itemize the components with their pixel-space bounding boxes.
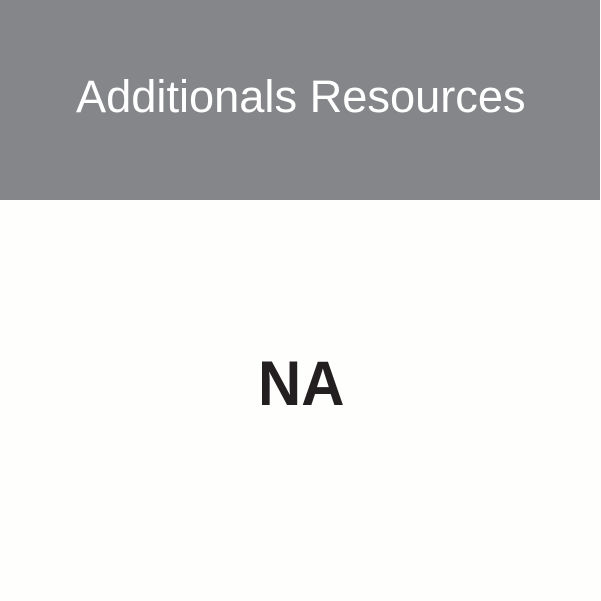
panel: header banner — [0, 0, 600, 200]
heading: Additionals Resources: Additionals Resources — [76, 71, 526, 122]
text: NA: NA — [258, 349, 344, 419]
